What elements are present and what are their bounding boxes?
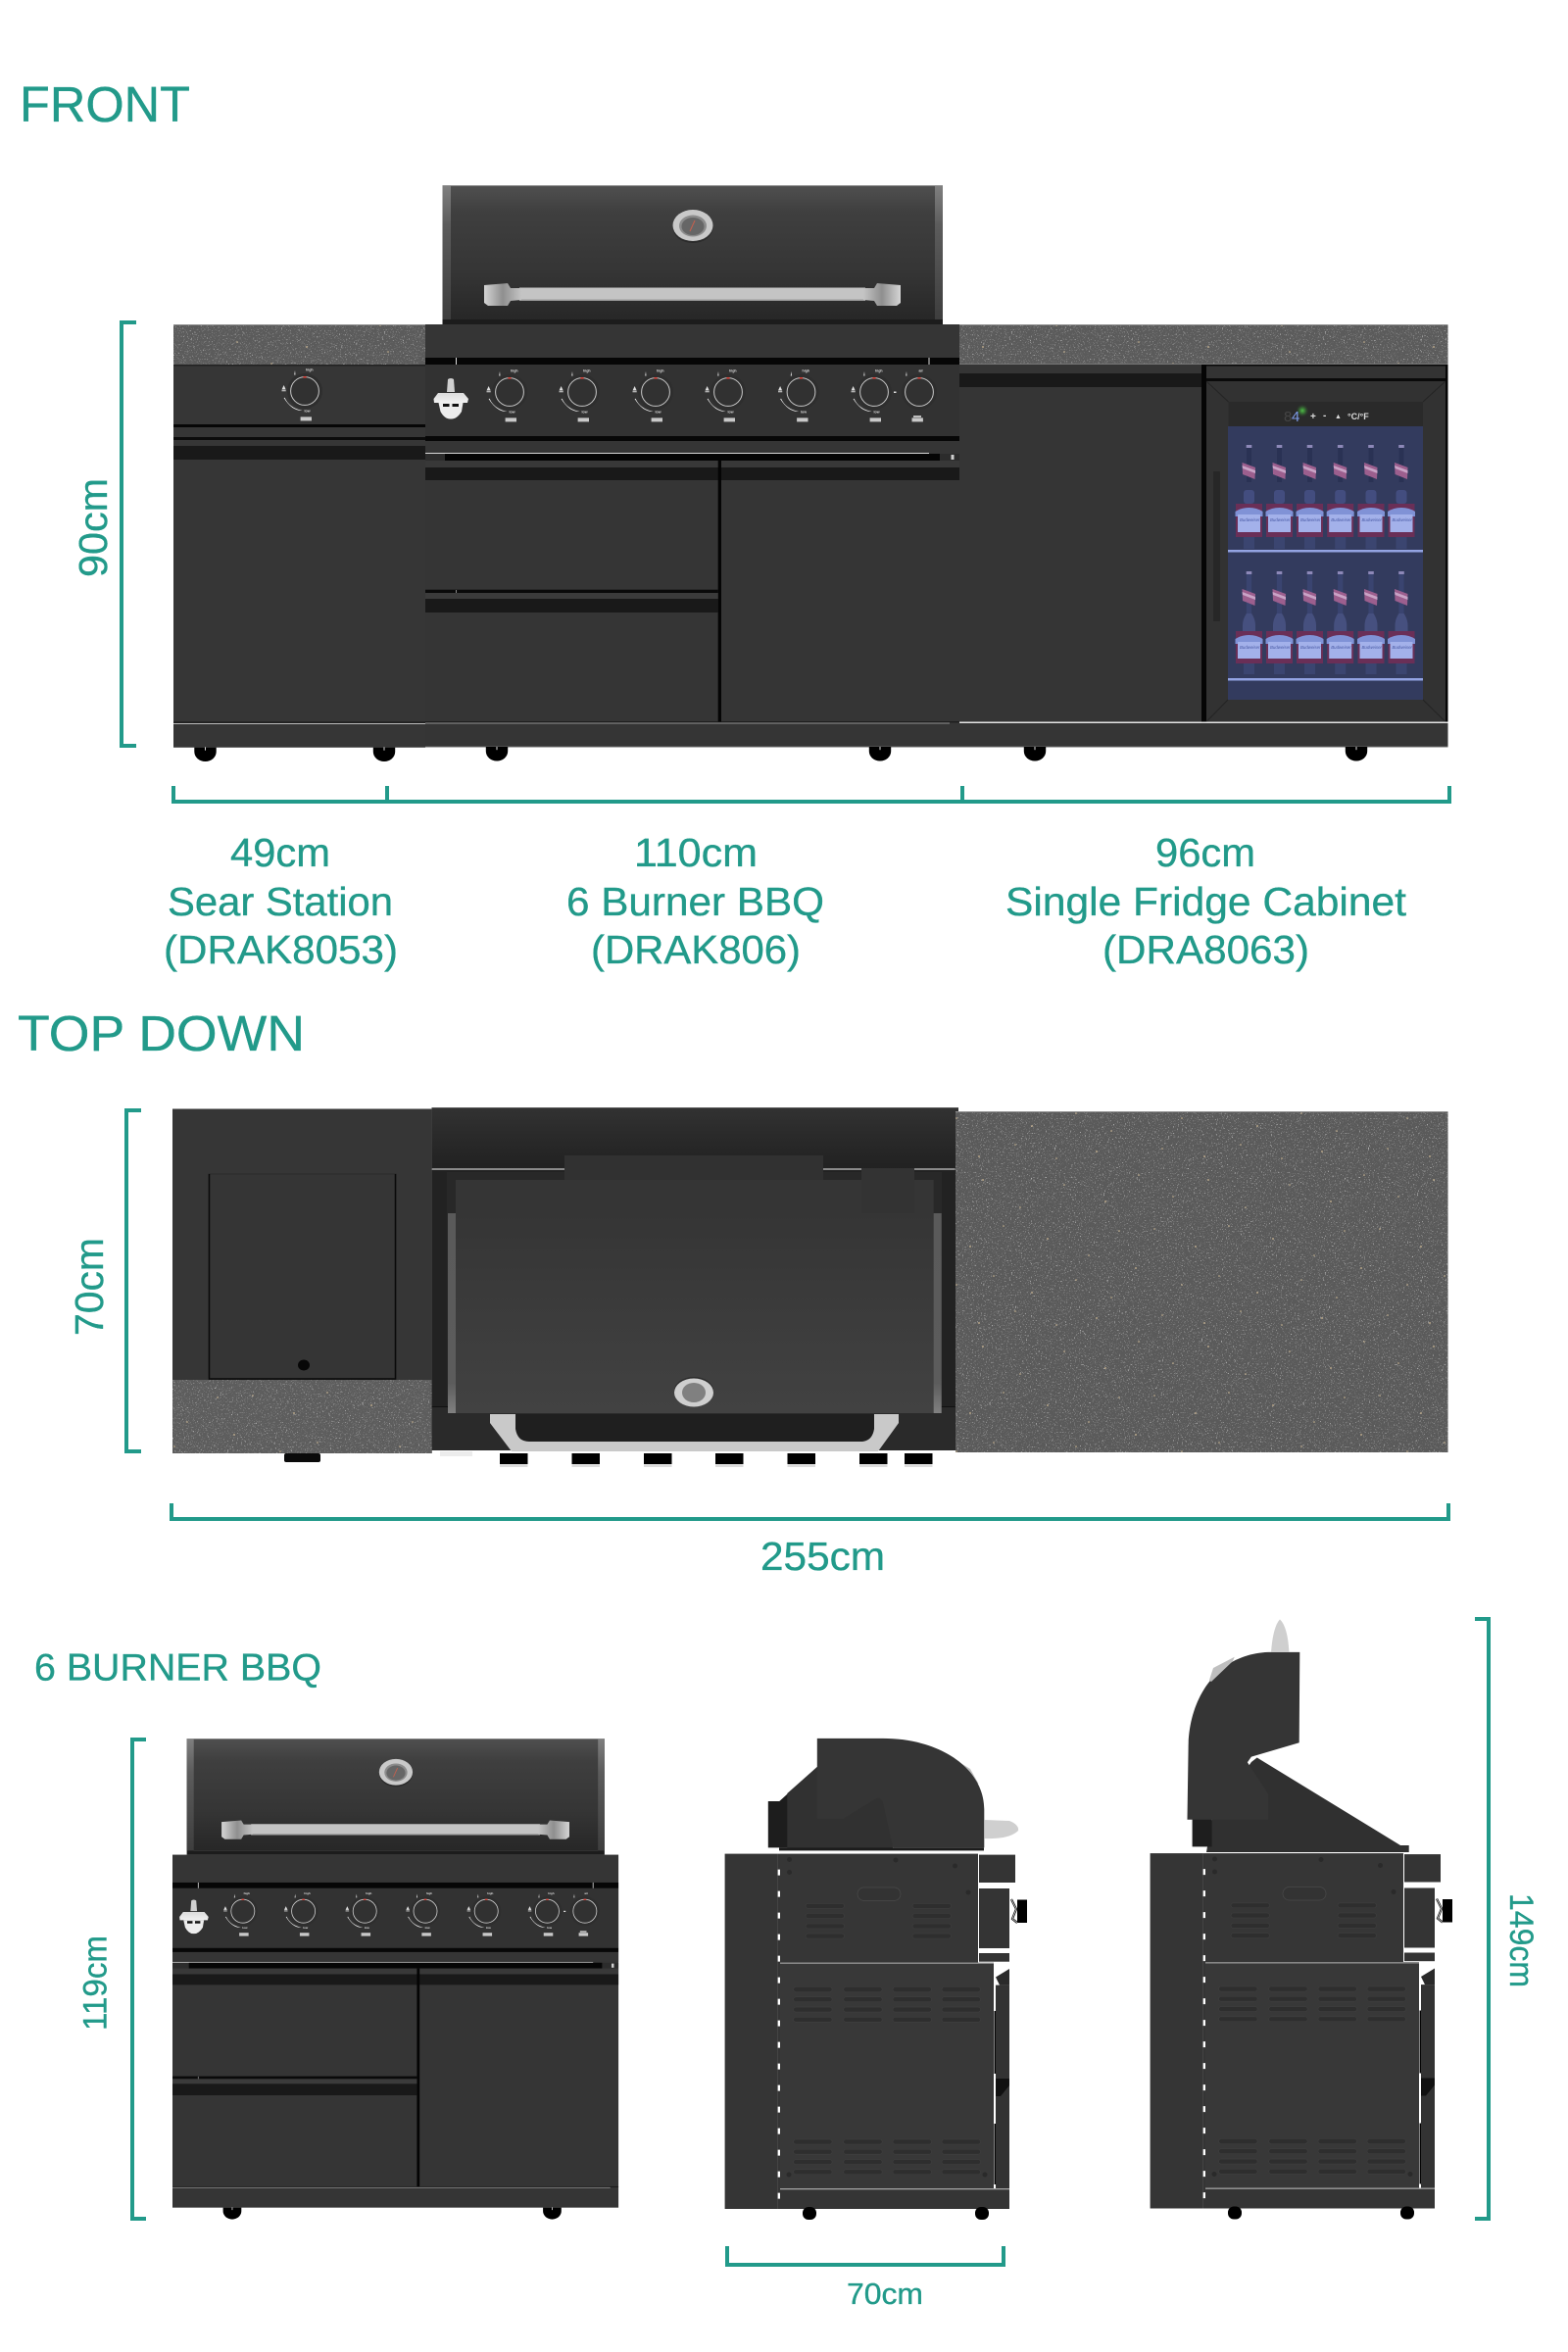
closed lid silhouette	[768, 1739, 984, 1850]
top view bbq	[432, 1107, 958, 1467]
label: 6 burner bbq	[566, 830, 824, 972]
bbq wheels	[486, 747, 891, 760]
label: sear station: Sear Station	[168, 879, 393, 924]
heading: top down: TOP DOWN	[18, 1005, 305, 1061]
dimension bracket: front widths	[173, 786, 1449, 802]
dimension: 70cm side depth: 70cm	[847, 2277, 923, 2311]
cabinet plinth	[959, 721, 1448, 747]
dimension: 119cm height	[76, 1740, 146, 2219]
bottle opener	[433, 378, 468, 419]
6 burner bbq	[425, 185, 959, 760]
bbq lid	[443, 185, 943, 324]
top view gauge	[674, 1377, 713, 1407]
sear station wheels	[194, 747, 395, 761]
dimension: 70cm depth	[67, 1110, 141, 1451]
closed lid handle	[984, 1820, 1018, 1838]
label: 6 burner bbq: (DRAK806)	[591, 927, 801, 972]
lid handle	[484, 283, 901, 306]
label: single fridge cabinet: 96cm	[1155, 830, 1255, 875]
bbq lid from above	[448, 1213, 942, 1413]
fridge control display: 4	[1292, 409, 1299, 425]
sear station	[173, 324, 425, 761]
bbq body	[425, 324, 959, 747]
label: 6 burner bbq: 110cm	[634, 830, 758, 875]
dimension: 255cm width	[172, 1503, 1448, 1579]
top view handle	[490, 1414, 899, 1451]
top view sear station	[172, 1108, 432, 1462]
dimension: 255cm width: 255cm	[760, 1534, 885, 1579]
label: 6 burner bbq: 6 Burner BBQ	[566, 879, 824, 924]
open lid gauge	[1209, 1657, 1235, 1682]
single fridge cabinet	[959, 324, 1448, 760]
bbq doors and drawers	[425, 461, 721, 722]
bbq rear flue	[564, 1155, 823, 1185]
panel: front view of outdoor kitchen	[173, 185, 1448, 761]
sear station stone	[172, 1380, 432, 1453]
panel: top down view	[172, 1107, 1448, 1467]
label: single fridge cabinet: (DRA8063)	[1102, 927, 1309, 972]
side elevation with lid open	[1151, 1619, 1452, 2219]
sear station dial	[282, 368, 322, 420]
fridge control display	[1229, 402, 1423, 426]
dimension: 90cm height: 90cm	[71, 478, 116, 577]
label: single fridge cabinet: Single Fridge Cabinet	[1005, 879, 1407, 924]
top shelf bottles	[1235, 445, 1415, 549]
open lid silhouette	[1188, 1652, 1299, 1820]
dimension: 149cm open height: 149cm	[1502, 1893, 1540, 1987]
fridge door handle	[1213, 471, 1220, 621]
fridge control display: +	[1310, 412, 1316, 422]
sear burner lid	[209, 1174, 396, 1380]
side cabinet with vents	[725, 1854, 1027, 2220]
sear dial tab	[284, 1453, 320, 1462]
side elevation with lid closed	[725, 1739, 1027, 2220]
heading: 6 burner bbq: 6 BURNER BBQ	[34, 1646, 321, 1690]
bbq lid back	[456, 1180, 934, 1215]
dimension: 70cm side depth	[727, 2246, 1004, 2311]
burner dials	[486, 368, 937, 421]
dimension: 90cm height	[71, 322, 136, 746]
label: sear station: (DRAK8053)	[164, 927, 398, 972]
top view cabinet stone	[956, 1111, 1448, 1452]
label: sear station: 49cm	[230, 830, 330, 875]
fridge control display: °C/°F	[1348, 412, 1369, 421]
dimension: 149cm open height	[1475, 1619, 1540, 2219]
cabinet wheels	[1024, 747, 1367, 760]
side cabinet repeated	[1151, 1853, 1452, 2219]
fridge control display: 8	[1284, 409, 1292, 425]
open lid handle	[1271, 1619, 1289, 1652]
bottom shelf bottles	[1235, 571, 1415, 674]
label: sear station	[164, 830, 398, 972]
dimension: 70cm depth: 70cm	[67, 1238, 112, 1336]
dimension: 119cm height: 119cm	[76, 1936, 114, 2031]
label: single fridge cabinet	[1005, 830, 1407, 972]
fridge door frame	[1206, 365, 1448, 722]
bbq plinth	[425, 721, 959, 747]
firebox wedge	[1206, 1758, 1409, 1852]
bbq front elevation	[172, 1739, 618, 2220]
fridge control display: -	[1323, 411, 1326, 421]
heading: front: FRONT	[20, 76, 190, 132]
cabinet door	[959, 365, 1206, 722]
rear block	[1193, 1819, 1212, 1846]
lid temperature gauge	[672, 210, 713, 243]
sear station stone counter	[173, 324, 425, 365]
fridge control display: ▲	[1335, 414, 1342, 420]
side bracket	[861, 1168, 914, 1213]
cabinet stone counter	[959, 324, 1448, 365]
fridge glass with bottles	[1228, 426, 1423, 700]
grill dial tabs	[440, 1451, 933, 1467]
